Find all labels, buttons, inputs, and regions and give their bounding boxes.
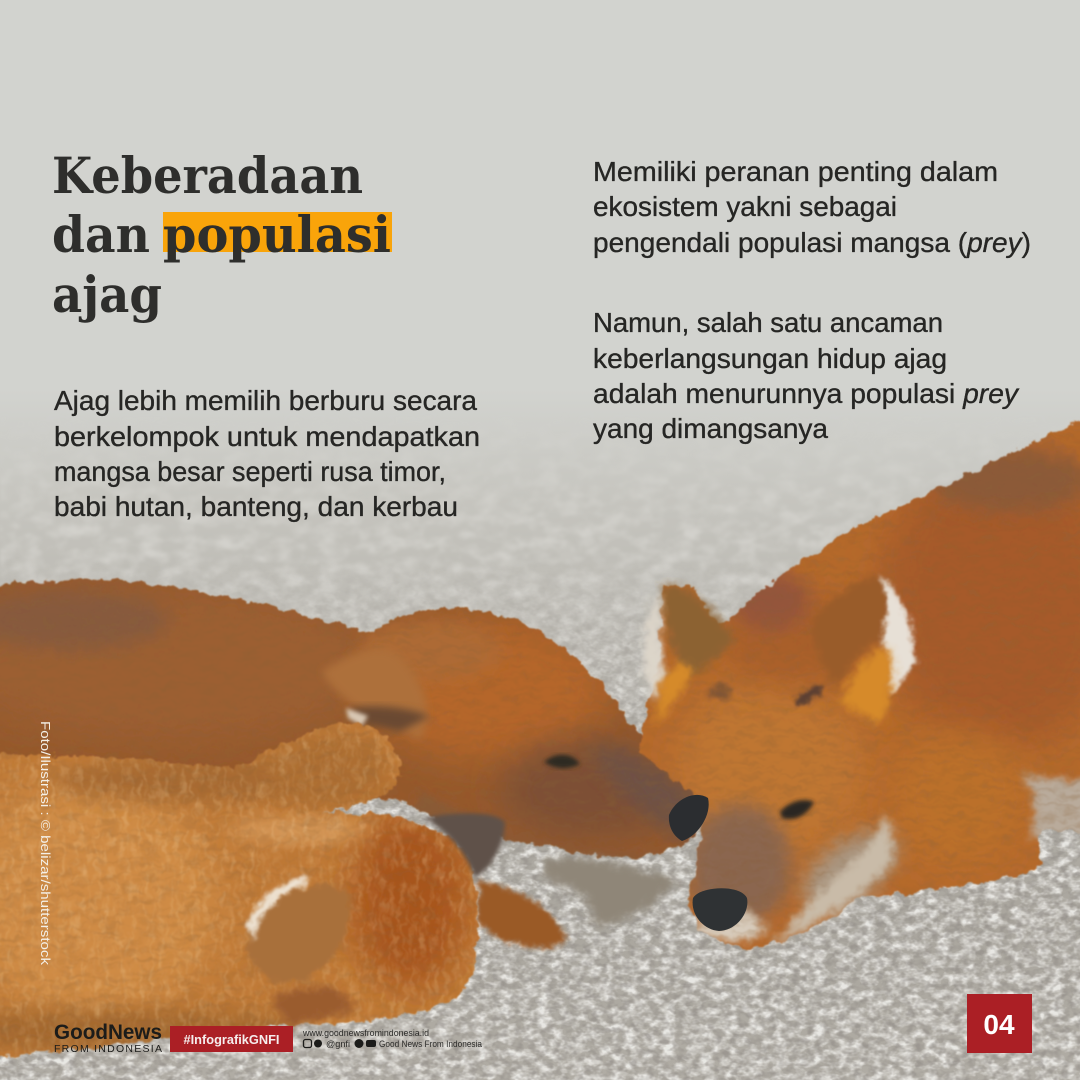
website and social handles: Good News From Indonesia <box>379 1039 482 1049</box>
photo credit: Foto/Ilustrasi : © belizar/shutterstock <box>38 721 52 966</box>
left ear <box>663 585 735 678</box>
face marks <box>795 683 825 705</box>
eye <box>780 800 814 819</box>
text block: hunting behaviour <box>54 385 480 522</box>
photo: dog lying upper left with muzzle <box>0 577 706 861</box>
website and social handles: @gnfi <box>326 1039 350 1049</box>
icons: instagram and twitter <box>304 1040 322 1048</box>
text block: threat: adalah menurunnya populasi prey <box>593 378 1020 409</box>
right ear <box>812 576 890 690</box>
text block: role in ecosystem: Memiliki peranan penting dalam <box>593 156 998 187</box>
website and social handles: www.goodnewsfromindonesia.id <box>302 1028 429 1039</box>
text block: role in ecosystem: ekosistem yakni sebagai <box>593 191 897 222</box>
page number badge: 04 <box>983 1009 1015 1040</box>
logo: GoodNews from Indonesia <box>54 1021 162 1055</box>
logo: GoodNews from Indonesia: FROM INDONESIA <box>54 1043 162 1055</box>
text block: hunting behaviour: berkelompok untuk mendapatkan <box>54 421 480 452</box>
text block: role in ecosystem: pengendali populasi mangsa ( prey) <box>593 227 1031 258</box>
eye <box>544 755 580 768</box>
logo: GoodNews from Indonesia: GoodNews <box>54 1021 162 1044</box>
text block: threat: yang dimangsanya <box>593 413 829 444</box>
website and social handles <box>302 1028 482 1049</box>
photo: dog right with face <box>638 420 1080 952</box>
ear of front dog <box>247 886 351 983</box>
text block: hunting behaviour: babi hutan, banteng, dan kerbau <box>54 491 458 522</box>
text block: threat: keberlangsungan hidup ajag <box>593 343 947 374</box>
title: ajag <box>52 265 162 324</box>
title highlight <box>163 212 392 252</box>
text block: hunting behaviour: Ajag lebih memilih berburu secara <box>54 385 478 416</box>
title: Keberadaan <box>52 146 363 205</box>
icons: facebook and youtube <box>354 1039 376 1048</box>
title <box>52 146 392 324</box>
title: dan <box>52 205 150 264</box>
text block: hunting behaviour: mangsa besar seperti rusa timor, <box>54 456 446 487</box>
text block: threat <box>593 307 1020 444</box>
ear of upper dog <box>322 649 427 740</box>
page number badge <box>967 994 1032 1053</box>
photo: front dog lying lower left <box>0 715 505 1060</box>
hashtag badge <box>170 1026 293 1052</box>
hashtag badge: #InfografikGNFI <box>184 1033 280 1047</box>
nose <box>693 888 747 931</box>
text block: role in ecosystem <box>593 156 1031 258</box>
text block: threat: Namun, salah satu ancaman <box>593 307 943 338</box>
photo: front paws and grey fur under muzzles <box>478 857 680 947</box>
muzzle whites <box>770 815 892 945</box>
photo: upper dog's nose <box>669 795 709 841</box>
background: sky-grey fading into gravel <box>0 437 1080 1080</box>
grey ear tip <box>425 813 505 878</box>
title: populasi <box>163 205 391 264</box>
